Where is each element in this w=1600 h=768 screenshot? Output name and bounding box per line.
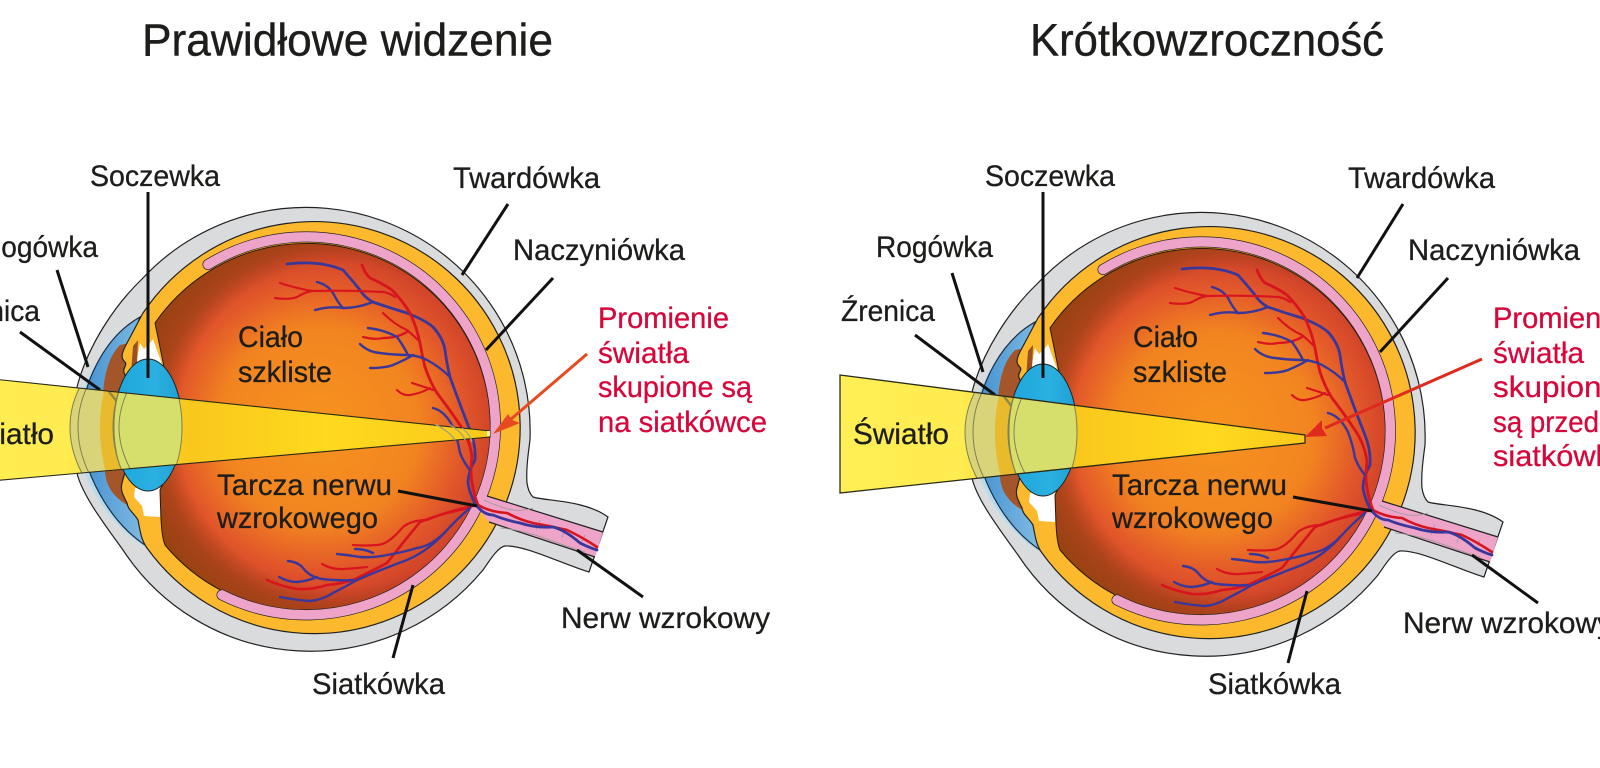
label: Twardówka: Twardówka: [453, 162, 600, 195]
label pointer: Tarcza nerwu line: [1293, 497, 1372, 511]
callout: rays focused on retina: skupione są: [598, 371, 752, 404]
label: Tarcza nerwu wzrokowego: Tarcza nerwu: [217, 469, 392, 502]
label pointer: Nerw wzrokowy line: [1472, 555, 1538, 603]
label: Nerw wzrokowy: Nerw wzrokowy: [561, 602, 770, 635]
label pointer: Tarcza nerwu line: [398, 491, 477, 506]
label: Soczewka: Soczewka: [985, 160, 1115, 193]
label pointer: Rogówka line: [57, 270, 88, 367]
label: Soczewka: Soczewka: [90, 160, 220, 193]
label pointer: Źrenica line: [20, 332, 100, 390]
light beam: [840, 375, 1305, 493]
beam outline: [840, 375, 1305, 493]
callout: rays focused on retina: światła: [598, 337, 689, 370]
label: Ciało szkliste: Ciało: [1133, 321, 1198, 354]
label pointer: Twardówka line: [462, 204, 508, 275]
panel: myopia: [840, 14, 1600, 701]
label: Ciało szkliste: szkliste: [238, 356, 332, 389]
label: Ciało szkliste: Ciało: [238, 321, 303, 354]
label: Twardówka: Twardówka: [1348, 162, 1495, 195]
label: Światło: Światło: [853, 417, 949, 451]
callout: rays focused on retina: na siatkówce: [598, 406, 767, 439]
red arrow to focus point: [1305, 359, 1482, 437]
beam outline: [0, 374, 490, 485]
label: Naczyniówka: Naczyniówka: [513, 234, 685, 267]
beam overlay on the front of the eye: [70, 388, 182, 472]
label: Siatkówka: Siatkówka: [1208, 668, 1341, 701]
callout: rays focused on retina: Promienie: [598, 302, 729, 335]
title: Prawidłowe widzenie: [142, 14, 553, 66]
panel: normal vision: [0, 14, 770, 701]
eyeball anatomy: [967, 212, 1503, 656]
label: Źrenica: Źrenica: [841, 295, 935, 328]
label pointer: Siatkówka line: [1288, 591, 1307, 663]
label: Siatkówka: Siatkówka: [312, 668, 445, 701]
label pointer: Twardówka line: [1357, 204, 1403, 278]
title: Krótkowzroczność: [1030, 14, 1384, 66]
red arrow to focus point: [493, 354, 587, 434]
eyeball anatomy: [72, 207, 608, 651]
label: Naczyniówka: Naczyniówka: [1408, 234, 1580, 267]
label pointer: Naczyniówka line: [486, 278, 553, 350]
label pointer: Siatkówka line: [393, 585, 413, 658]
label pointer: Naczyniówka line: [1380, 278, 1448, 352]
label pointer: Rogówka line: [952, 273, 983, 372]
beam overlay on the front of the eye: [964, 393, 1078, 478]
label: Rogówka: Rogówka: [876, 231, 993, 264]
label pointer: Nerw wzrokowy line: [577, 550, 643, 597]
label pointer: Soczewka line: [146, 192, 150, 378]
label: Ciało szkliste: szkliste: [1133, 356, 1227, 389]
label pointer: Źrenica line: [915, 335, 995, 395]
callout: rays focused in front of retina: światła: [1493, 337, 1584, 370]
light beam: [0, 374, 490, 485]
label pointer: Soczewka line: [1042, 192, 1044, 378]
beam fade over retinal vessels: [435, 424, 472, 442]
label: Tarcza nerwu wzrokowego: wzrokowego: [216, 502, 378, 535]
label: Tarcza nerwu wzrokowego: Tarcza nerwu: [1112, 469, 1287, 502]
label: Tarcza nerwu wzrokowego: wzrokowego: [1111, 502, 1273, 535]
focus point on retina: [487, 431, 490, 436]
